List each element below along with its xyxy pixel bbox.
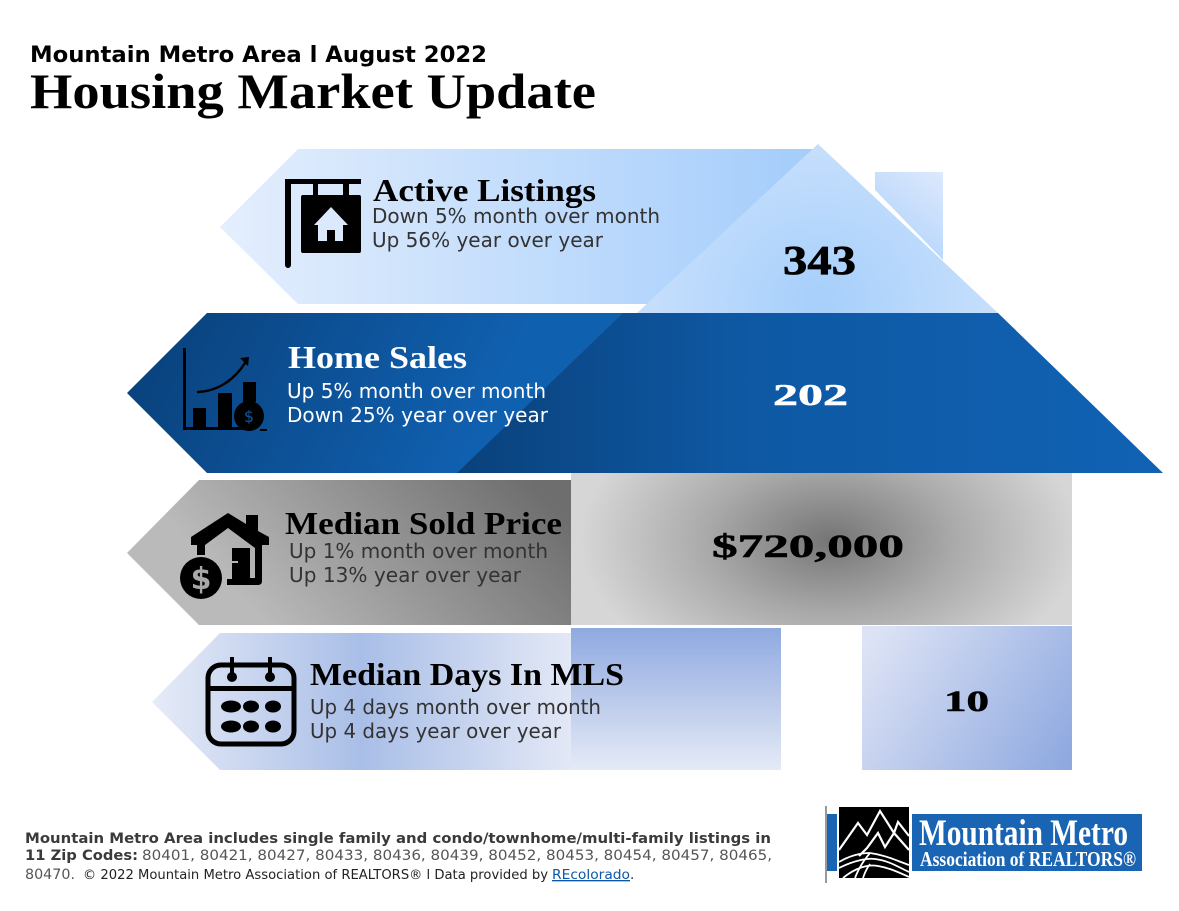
footnote: 80470. bbox=[25, 867, 75, 883]
home sales text: Down 25% year over year bbox=[287, 403, 549, 427]
icon: house with dollar coin: $ bbox=[191, 562, 211, 597]
icon: calendar bbox=[208, 657, 294, 744]
active listings text: Down 5% month over month bbox=[372, 204, 660, 228]
logo: Mountain Metro Association of REALTORS: Mountain Metro bbox=[919, 813, 1128, 854]
footnote: . bbox=[630, 867, 634, 883]
footnote: 80401, 80421, 80427, 80433, 80436, 80439, 80452, 80453, 80454, 80457, 80465, bbox=[142, 848, 772, 864]
house middle body bbox=[571, 473, 1072, 625]
footnote: © 2022 Mountain Metro Association of REALTORS® l Data provided by bbox=[83, 867, 548, 883]
active listings text bbox=[372, 172, 660, 252]
median sold price text: Median Sold Price bbox=[285, 505, 562, 541]
home sales text: Home Sales bbox=[288, 339, 467, 375]
arrow panel: home sales bbox=[127, 313, 640, 473]
chimney bbox=[875, 172, 943, 260]
arrow panel: median sold price bbox=[127, 480, 571, 625]
footnote: Mountain Metro Area includes single family and condo/townhome/multi-family listings in bbox=[25, 831, 771, 847]
active listings text: Active Listings bbox=[373, 172, 596, 208]
house roof bbox=[637, 144, 998, 313]
arrow panel: median days in MLS bbox=[152, 633, 571, 770]
icon: chart with dollar bbox=[183, 348, 267, 431]
logo: Mountain Metro Association of REALTORS bbox=[825, 806, 1142, 883]
icon: house with dollar coin bbox=[180, 513, 269, 599]
median days in MLS text bbox=[310, 656, 624, 743]
footnote: 11 Zip Codes: bbox=[25, 848, 138, 864]
house lower left wall bbox=[571, 628, 781, 770]
house upper body bbox=[457, 313, 1163, 473]
footnote: REcolorado bbox=[552, 867, 630, 883]
median sold price text: Up 13% year over year bbox=[289, 563, 522, 587]
value: active listings: 343 bbox=[783, 237, 856, 283]
icon: chart with dollar: $ bbox=[244, 407, 254, 426]
logo: Mountain Metro Association of REALTORS: Association of REALTORS® bbox=[920, 847, 1136, 871]
median days in MLS text: Up 4 days year over year bbox=[310, 719, 562, 743]
footnote bbox=[25, 831, 772, 883]
value: median sold price: $720,000 bbox=[712, 529, 904, 565]
arrow panel: active listings bbox=[220, 149, 812, 304]
icon: hanging sign bbox=[285, 179, 361, 268]
home sales text bbox=[287, 339, 549, 427]
title: Housing Market Update bbox=[30, 63, 596, 119]
value: median days in MLS: 10 bbox=[944, 686, 989, 718]
home sales text: Up 5% month over month bbox=[287, 379, 546, 403]
house door panel bbox=[862, 626, 1072, 770]
subtitle: Mountain Metro Area l August 2022 bbox=[30, 43, 487, 68]
value: home sales: 202 bbox=[773, 378, 848, 412]
median days in MLS text: Median Days In MLS bbox=[310, 656, 624, 692]
median sold price text: Up 1% month over month bbox=[289, 539, 548, 563]
median days in MLS text: Up 4 days month over month bbox=[310, 695, 601, 719]
active listings text: Up 56% year over year bbox=[372, 228, 604, 252]
median sold price text bbox=[285, 505, 562, 587]
